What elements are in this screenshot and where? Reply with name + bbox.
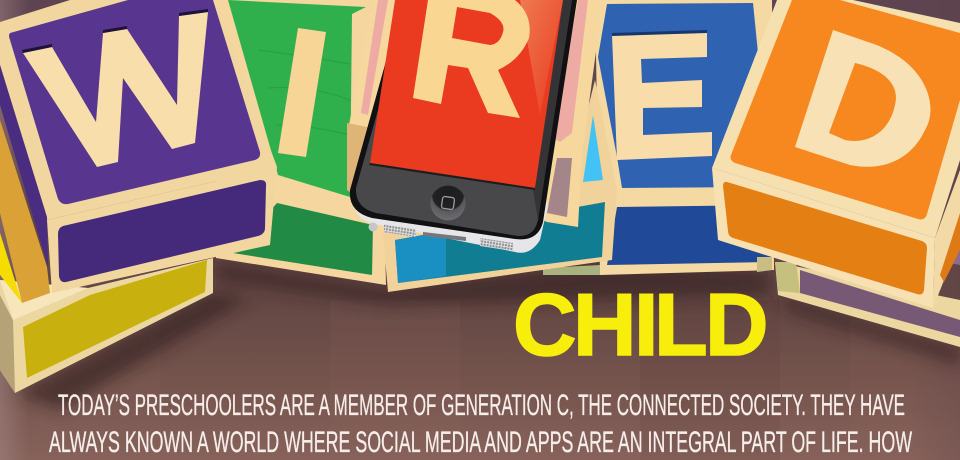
phone red screen <box>370 0 563 188</box>
letter W <box>23 12 208 167</box>
block: mauve, back right <box>775 235 960 347</box>
block: yellow, back left <box>0 233 213 393</box>
phone black frame <box>350 0 577 239</box>
block: green I <box>216 0 386 285</box>
block: purple W <box>0 0 277 303</box>
block: orange D <box>712 0 960 308</box>
block: red R <box>347 0 603 227</box>
letter E <box>612 32 712 160</box>
heading: CHILD: CHILD <box>513 275 769 374</box>
letter R <box>413 0 530 118</box>
block: cyan, partly hidden <box>383 80 617 292</box>
iPhone <box>350 0 577 253</box>
phone bezel <box>356 0 572 236</box>
phone side edge <box>533 0 572 220</box>
letter D <box>795 30 930 167</box>
phone silver base <box>352 160 548 253</box>
intro text <box>49 389 912 459</box>
speaker and grilles <box>368 222 513 251</box>
letter I <box>278 28 326 157</box>
home button <box>430 186 466 220</box>
block: blue E <box>543 0 774 275</box>
